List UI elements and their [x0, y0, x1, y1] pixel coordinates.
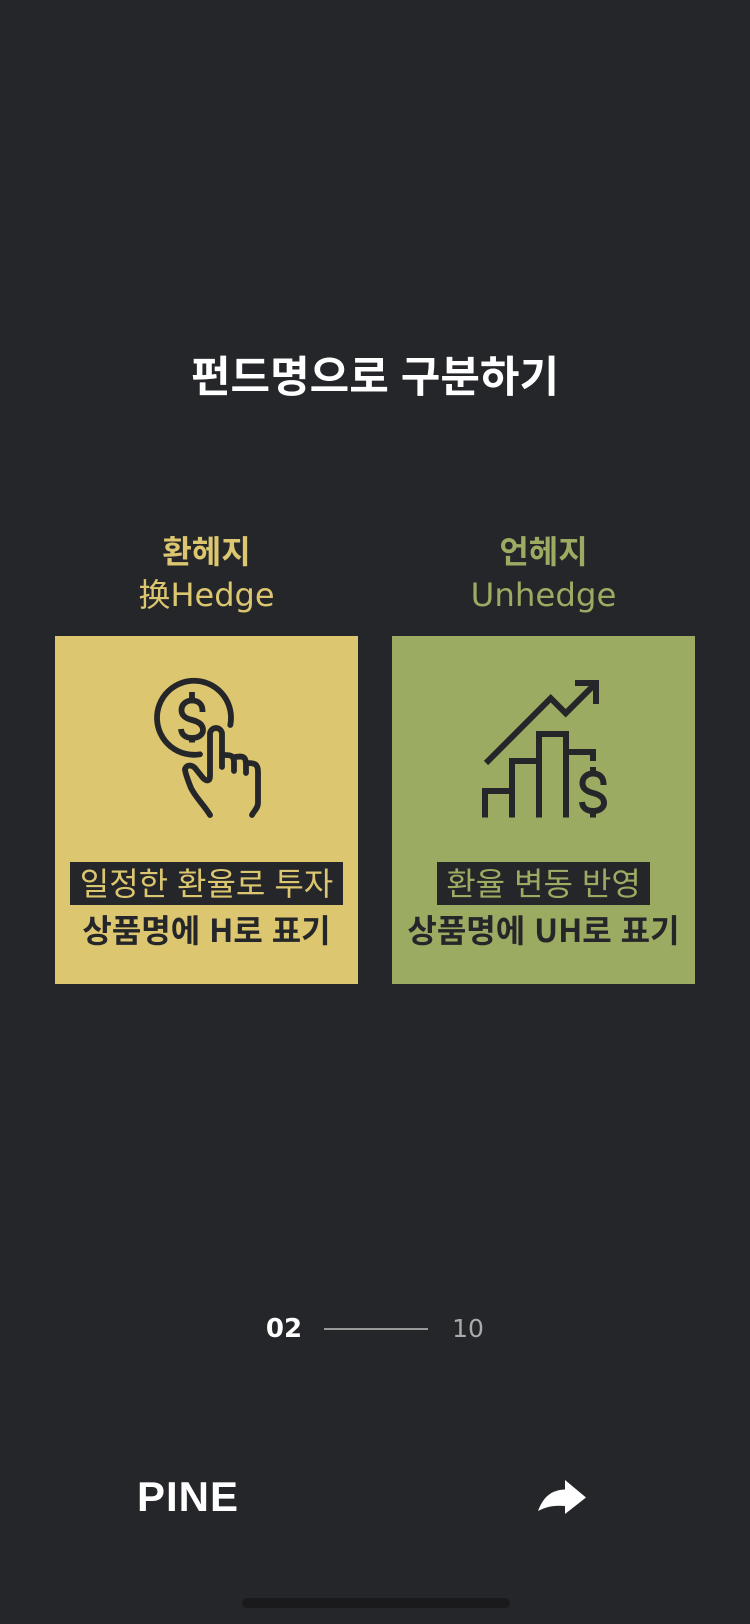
page progress line: [324, 1328, 428, 1330]
panel: hedge: [55, 636, 358, 984]
icon: share arrow: [538, 1480, 586, 1514]
icon: rising chart with dollar: [482, 680, 607, 818]
panel: unhedge: [392, 636, 695, 984]
subheading: 换Hedge: 换Hedge: [138, 576, 275, 614]
icon: hand pressing dollar coin: [154, 678, 261, 818]
home indicator: [242, 1598, 510, 1608]
subheading: Unhedge: Unhedge: [471, 576, 616, 614]
heading: 언헤지: 언헤지: [499, 527, 588, 573]
heading: 환헤지: 환헤지: [162, 527, 251, 573]
page number: total: 10: [452, 1314, 484, 1343]
label: 환율 변동 반영: 환율 변동 반영: [446, 859, 641, 905]
label: 일정한 환율로 투자: 일정한 환율로 투자: [80, 859, 333, 905]
label: 상품명에 UH로 표기: 상품명에 UH로 표기: [407, 906, 680, 952]
label: 상품명에 H로 표기: 상품명에 H로 표기: [82, 906, 331, 952]
page number: current: 02: [266, 1314, 302, 1344]
title: 펀드명으로 구분하기: [191, 343, 559, 405]
brand: PINE: PINE: [137, 1473, 239, 1520]
